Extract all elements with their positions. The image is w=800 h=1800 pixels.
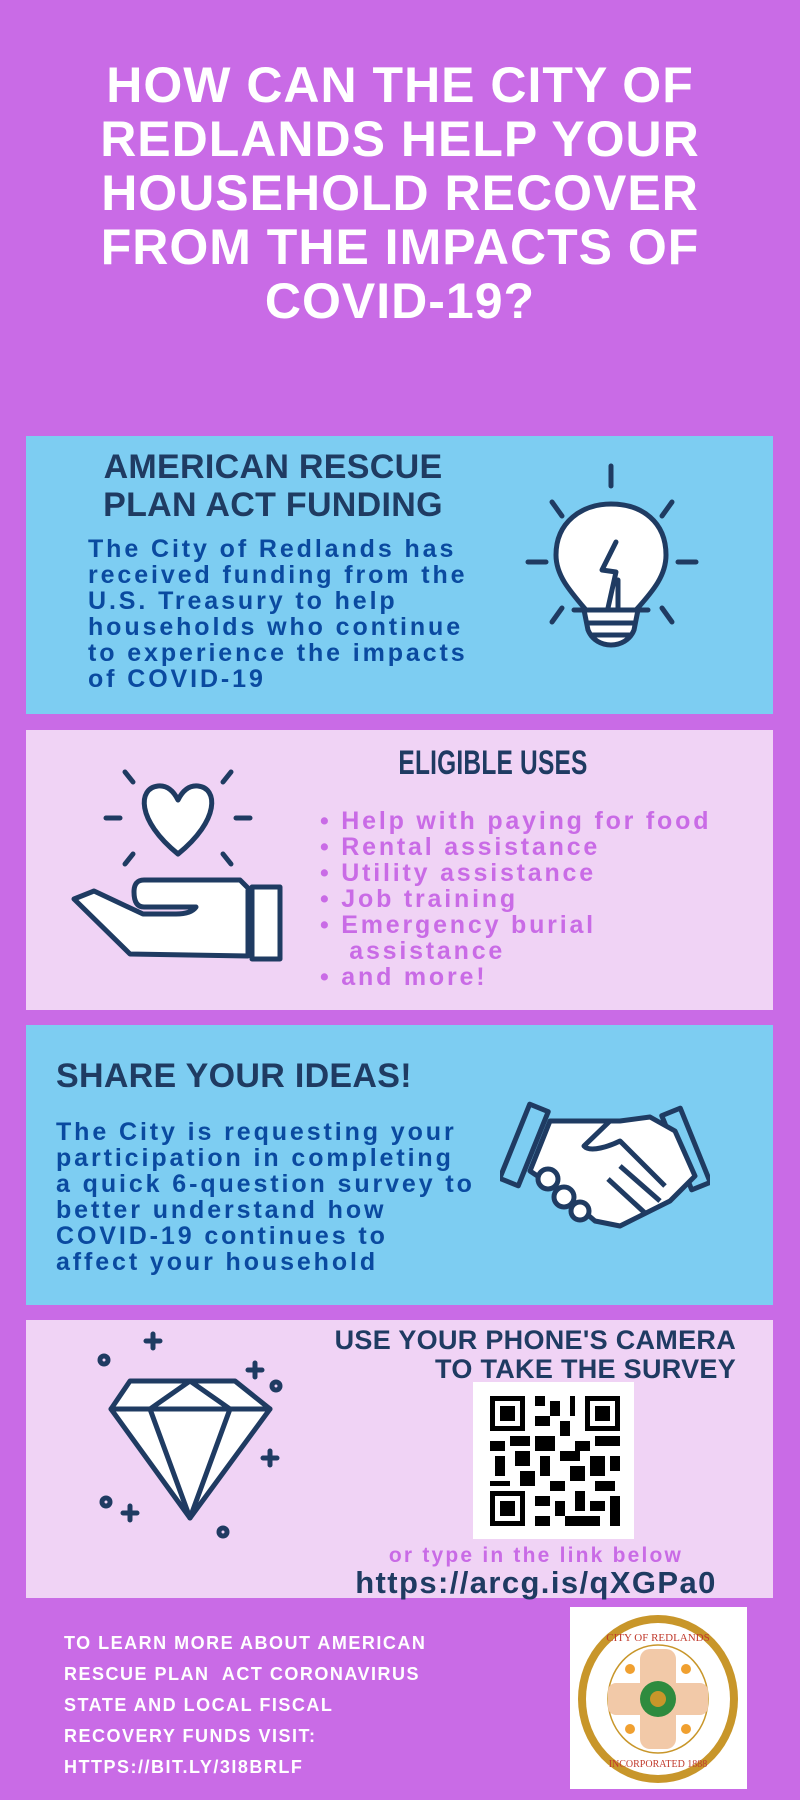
text: funding description: households who continue (88, 613, 463, 641)
seal: City of Redlands: CITY OF REDLANDS (606, 1632, 710, 1644)
footer text: TO LEARN MORE ABOUT AMERICAN (64, 1633, 426, 1653)
text: funding description: U.S. Treasury to help (88, 587, 398, 615)
text: link prompt: or type in the link below (389, 1544, 683, 1567)
icon: light bulb (526, 464, 698, 648)
icon: diamond (98, 1332, 282, 1538)
heading: use phone camera (335, 1325, 736, 1384)
list: eligible uses: • Rental assistance (320, 833, 600, 861)
footer text: HTTPS://BIT.LY/3I8BRLF (64, 1757, 303, 1777)
seal: City of Redlands: INCORPORATED 1888 (609, 1759, 707, 1770)
text: funding description: of COVID-19 (88, 665, 266, 693)
panel: eligible uses (26, 730, 773, 1010)
text: survey request: better understand how (56, 1196, 386, 1224)
footer text (64, 1633, 426, 1777)
list: eligible uses: • Help with paying for food (320, 807, 711, 835)
text: survey request (56, 1118, 475, 1276)
heading: ARPA funding (103, 448, 443, 524)
QR code (473, 1382, 634, 1539)
title: COVID-19? (265, 273, 535, 329)
text: funding description: to experience the impacts (88, 639, 468, 667)
text: funding description: The City of Redlands has (88, 535, 456, 563)
heading: ARPA funding: AMERICAN RESCUE (104, 448, 442, 486)
footer text: RECOVERY FUNDS VISIT: (64, 1726, 317, 1746)
heading: ARPA funding: PLAN ACT FUNDING (103, 486, 443, 524)
seal: City of Redlands (570, 1607, 747, 1789)
footer text: RESCUE PLAN ACT CORONAVIRUS (64, 1664, 420, 1684)
heading: eligible uses: ELIGIBLE USES (398, 744, 588, 782)
list: eligible uses: • and more! (320, 963, 487, 991)
text: survey request: The City is requesting your (56, 1118, 457, 1146)
list: eligible uses: assistance (349, 937, 505, 965)
title: REDLANDS HELP YOUR (100, 111, 700, 167)
text: survey request: a quick 6-question survey to (56, 1170, 475, 1198)
icon: heart in hand (72, 770, 282, 962)
text: survey request: affect your household (56, 1248, 378, 1276)
heading: use phone camera: TO TAKE THE SURVEY (435, 1354, 736, 1384)
title: FROM THE IMPACTS OF (101, 219, 699, 275)
panel: QR survey (26, 1320, 773, 1598)
text: survey request: COVID-19 continues to (56, 1222, 388, 1250)
title: HOW CAN THE CITY OF (106, 57, 694, 113)
text: survey URL: https://arcg.is/qXGPa0 (355, 1565, 717, 1600)
icon: handshake (500, 1102, 710, 1228)
list: eligible uses: • Job training (320, 885, 518, 913)
list: eligible uses: • Utility assistance (320, 859, 596, 887)
panel: share your ideas (26, 1025, 773, 1305)
panel: ARPA funding (26, 436, 773, 714)
text: funding description: received funding from the (88, 561, 467, 589)
list: eligible uses: • Emergency burial (320, 911, 596, 939)
title: HOUSEHOLD RECOVER (101, 165, 699, 221)
heading: share your ideas: SHARE YOUR IDEAS! (56, 1057, 412, 1095)
text: funding description (88, 535, 468, 693)
text: survey request: participation in completing (56, 1144, 454, 1172)
heading: use phone camera: USE YOUR PHONE'S CAMERA (335, 1325, 736, 1355)
list: eligible uses (320, 807, 711, 991)
title (100, 57, 700, 329)
footer text: STATE AND LOCAL FISCAL (64, 1695, 333, 1715)
